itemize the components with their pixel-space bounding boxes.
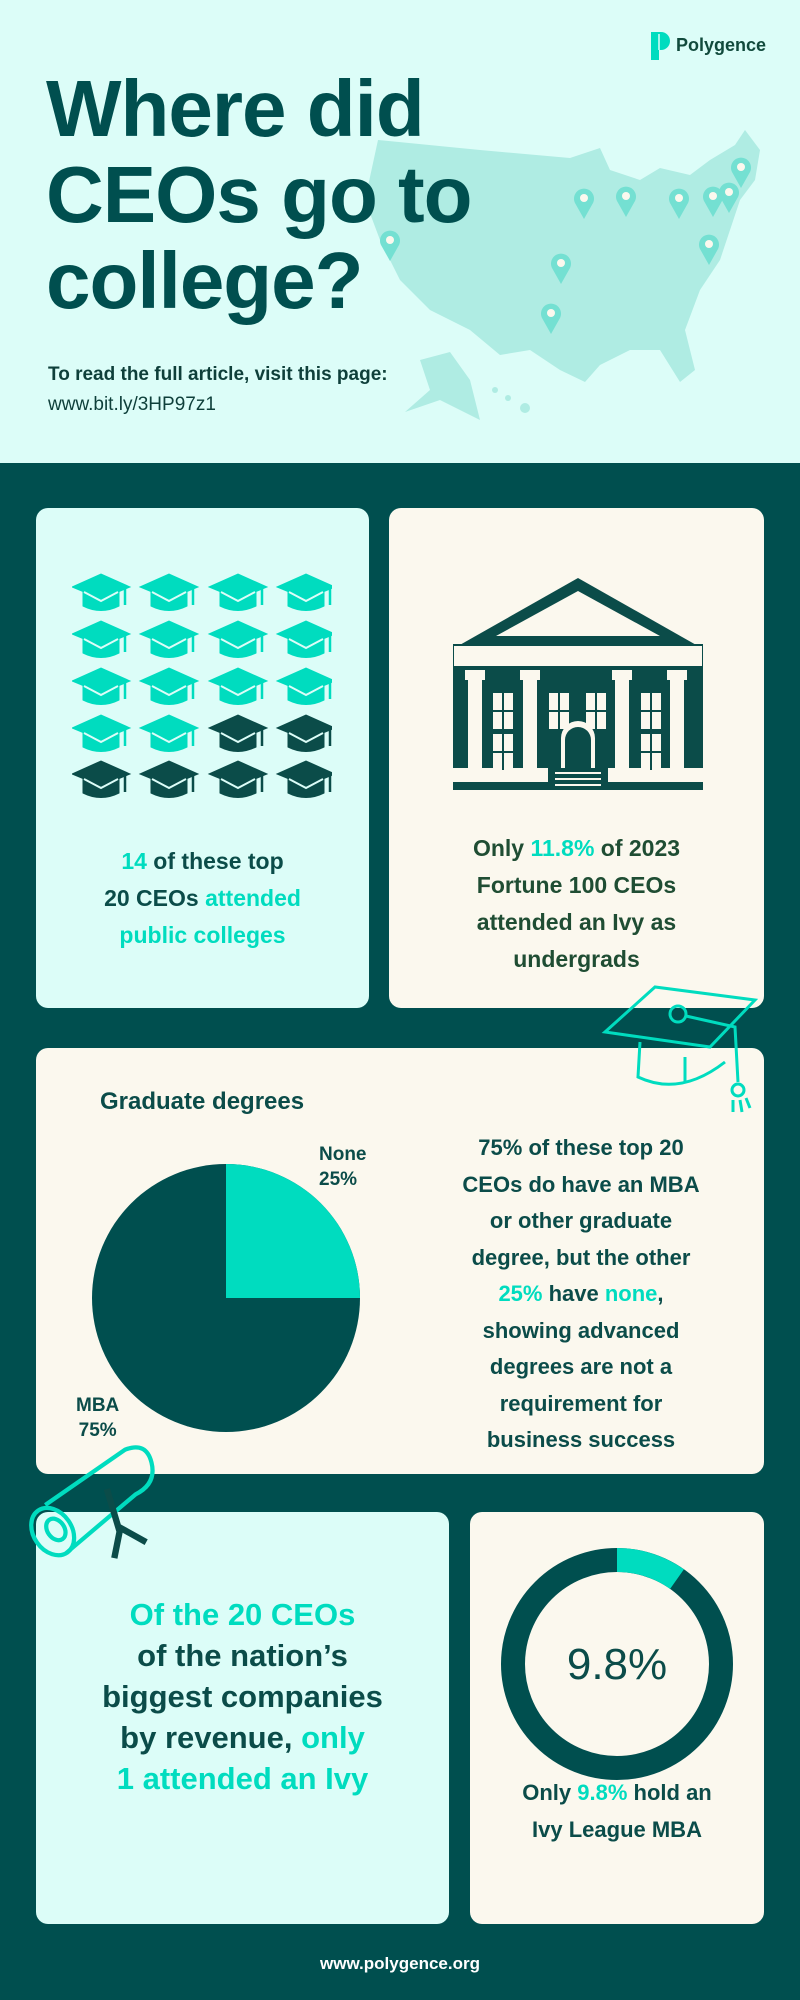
panel: graduate degrees xyxy=(36,1048,764,1474)
donut chart xyxy=(501,1548,733,1780)
map of USA xyxy=(368,130,760,420)
text: graduate degree explanation: requirement for xyxy=(500,1390,662,1416)
text: graduate degree explanation: CEOs do have an MBA xyxy=(462,1172,700,1196)
text: 1 of 20 Ivy xyxy=(102,1597,383,1796)
text: 1 of 20 Ivy: Of the 20 CEOs xyxy=(130,1597,355,1632)
text: 9.8% Ivy MBA xyxy=(522,1780,712,1842)
logo: Polygence: Polygence xyxy=(676,35,766,55)
text: 1 of 20 Ivy: by revenue, only xyxy=(120,1720,365,1755)
pie chart xyxy=(92,1164,360,1432)
text: 14 of 20: 14 of these top xyxy=(121,848,284,874)
icon: diploma scroll xyxy=(29,1445,155,1559)
label: None 25%: 25% xyxy=(319,1169,357,1190)
icon: graduation cap outline xyxy=(602,985,758,1112)
text: graduate degree explanation: degrees are not a xyxy=(490,1354,672,1379)
text: 11.8% Ivy xyxy=(473,835,680,972)
panel: Ivy League MBA xyxy=(470,1512,764,1924)
text: graduate degree explanation xyxy=(462,1135,700,1452)
icon grid: graduation caps xyxy=(72,574,332,798)
text: 14 of 20 xyxy=(104,848,301,948)
logo: Polygence xyxy=(651,32,766,60)
title: CEOs go to xyxy=(46,150,472,239)
label: MBA 75% xyxy=(76,1395,119,1441)
panel: public colleges xyxy=(36,508,369,1008)
label: None 25%: None xyxy=(319,1144,366,1165)
icon: university building xyxy=(453,578,703,790)
title xyxy=(46,64,472,325)
text: 9.8% Ivy MBA: Ivy League MBA xyxy=(532,1817,702,1842)
text: 11.8% Ivy: Only 11.8% of 2023 xyxy=(473,835,680,861)
text: 1 of 20 Ivy: of the nation’s xyxy=(137,1638,348,1673)
text: 11.8% Ivy: undergrads xyxy=(513,946,640,972)
text: graduate degree explanation: 25% have none, xyxy=(498,1281,664,1306)
text: 9.8% Ivy MBA: Only 9.8% hold an xyxy=(522,1780,712,1805)
icon: location pins xyxy=(380,158,751,334)
text: graduate degree explanation: showing advanced xyxy=(483,1318,679,1342)
text: graduate degree explanation: 75% of these top 20 xyxy=(478,1135,684,1160)
text: graduate degree explanation: business success xyxy=(487,1427,675,1452)
label: MBA 75%: MBA xyxy=(76,1395,119,1416)
text: 14 of 20: 20 CEOs attended xyxy=(104,885,301,911)
text: graduate degree explanation: or other graduate xyxy=(490,1208,672,1233)
label: None 25% xyxy=(319,1144,366,1190)
label: MBA 75%: 75% xyxy=(79,1420,117,1441)
text: 11.8% Ivy: attended an Ivy as xyxy=(477,909,676,935)
panel: only 1 attended an Ivy xyxy=(36,1512,449,1924)
text: article link: To read the full article, visit this page: xyxy=(48,364,388,385)
header section xyxy=(0,0,800,463)
text: 1 of 20 Ivy: 1 attended an Ivy xyxy=(117,1761,368,1796)
donut chart: 9.8% xyxy=(567,1640,667,1689)
text: 1 of 20 Ivy: biggest companies xyxy=(102,1679,383,1714)
text: 11.8% Ivy: Fortune 100 CEOs xyxy=(477,872,676,898)
text: article link xyxy=(48,364,388,415)
text: article link: www.bit.ly/3HP97z1 xyxy=(48,394,216,415)
panel: Ivy undergrads xyxy=(389,508,764,1008)
title: Where did xyxy=(46,64,424,153)
footer: www.polygence.org xyxy=(320,1954,480,1973)
text: graduate degree explanation: degree, but the other xyxy=(472,1244,690,1270)
text: 14 of 20: public colleges xyxy=(119,922,286,948)
title: college? xyxy=(46,236,363,325)
heading: Graduate degrees: Graduate degrees xyxy=(100,1088,304,1115)
